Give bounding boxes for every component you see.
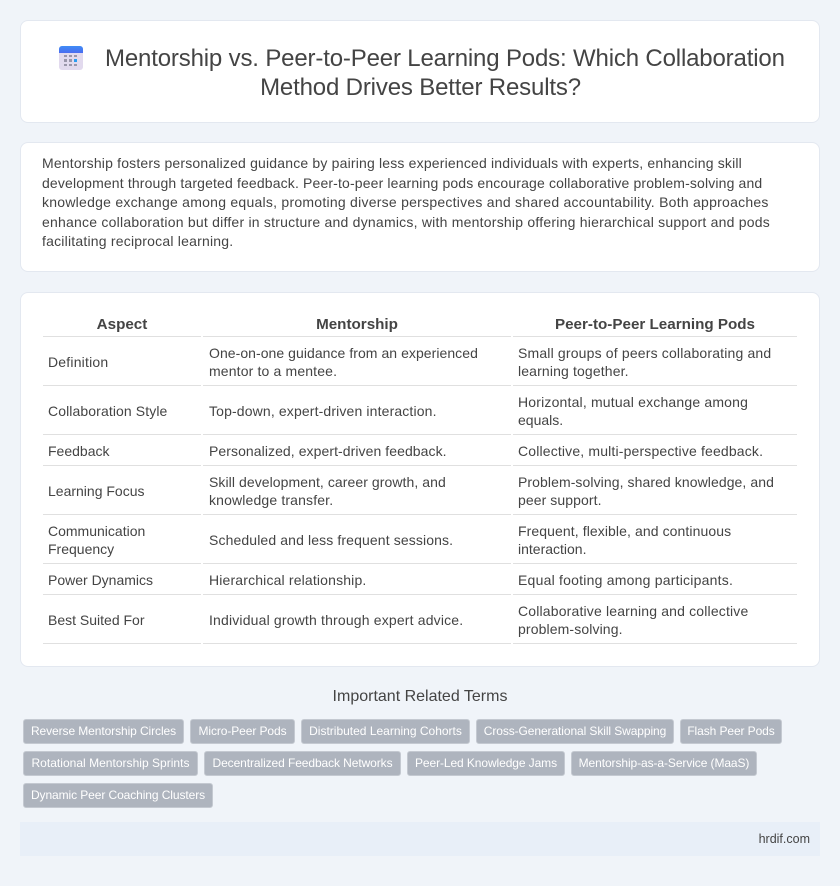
tag: Rotational Mentorship Sprints (32, 756, 190, 770)
heading (105, 45, 785, 101)
table header: Aspect (97, 316, 147, 333)
summary paragraph: enhance collaboration but differ in structure and dynamics, with mentorship offering hierarchical support and pods (42, 214, 770, 230)
row: best suited for: problem-solving. (518, 621, 623, 637)
row: power dynamics (48, 572, 733, 588)
row: power dynamics: Power Dynamics (48, 572, 153, 588)
row: feedback: Personalized, expert-driven feedback. (209, 443, 447, 459)
comparison table (43, 316, 797, 644)
summary paragraph: development through targeted feedback. Peer-to-peer learning pods encourage collaborative problem-solving and (42, 175, 762, 191)
summary paragraph: facilitating reciprocal learning. (42, 233, 233, 249)
row: feedback (48, 443, 763, 459)
row: communication frequency: Communication (48, 523, 145, 539)
row: feedback: Collective, multi-perspective feedback. (518, 443, 763, 459)
heading: Mentorship vs. Peer-to-Peer Learning Pods: Which Collaboration (105, 45, 785, 72)
row: communication frequency (48, 523, 731, 557)
tag: Dynamic Peer Coaching Clusters (31, 788, 205, 802)
row: best suited for: Individual growth through expert advice. (209, 612, 463, 628)
related term tags (23, 719, 782, 808)
panel: title (20, 20, 820, 123)
tag (23, 719, 184, 744)
row: collaboration style: Collaboration Style (48, 403, 167, 419)
row: collaboration style: Top-down, expert-driven interaction. (209, 403, 437, 419)
summary paragraph: knowledge exchange among equals, promoting diverse perspectives and shared accountability. Both approaches (42, 194, 769, 210)
tag (407, 751, 565, 776)
row: communication frequency: Frequency (48, 541, 114, 557)
row: learning focus: knowledge transfer. (209, 492, 333, 508)
tag: Peer-Led Knowledge Jams (415, 756, 557, 770)
tag (301, 719, 470, 744)
row: communication frequency: interaction. (518, 541, 586, 557)
panel: comparison table (20, 292, 820, 667)
tag (190, 719, 295, 744)
row: best suited for: Collaborative learning and collective (518, 603, 748, 619)
row: definition: learning together. (518, 363, 629, 379)
tag (571, 751, 757, 776)
footer source: hrdif.com (759, 832, 810, 846)
table header: Mentorship (316, 316, 398, 333)
table header: Peer-to-Peer Learning Pods (555, 316, 755, 333)
row: definition (48, 345, 771, 379)
tag (680, 719, 782, 744)
row: power dynamics: Hierarchical relationship. (209, 572, 366, 588)
tag: Distributed Learning Cohorts (309, 724, 462, 738)
row: collaboration style: equals. (518, 412, 563, 428)
tag: Cross-Generational Skill Swapping (484, 724, 666, 738)
tag: Micro-Peer Pods (198, 724, 286, 738)
row: best suited for: Best Suited For (48, 612, 144, 628)
tag: Decentralized Feedback Networks (213, 756, 392, 770)
row: learning focus: Problem-solving, shared knowledge, and (518, 474, 774, 490)
row: learning focus (48, 474, 774, 508)
tag (476, 719, 674, 744)
row: definition: Definition (48, 354, 108, 370)
row: communication frequency: Frequent, flexible, and continuous (518, 523, 731, 539)
row: collaboration style: Horizontal, mutual exchange among (518, 394, 748, 410)
tag (23, 783, 213, 808)
row: communication frequency: Scheduled and less frequent sessions. (209, 532, 453, 548)
summary paragraph (42, 155, 770, 249)
table header (97, 316, 755, 333)
row: learning focus: Skill development, career growth, and (209, 474, 446, 490)
row: definition: Small groups of peers collaborating and (518, 345, 771, 361)
row: power dynamics: Equal footing among participants. (518, 572, 733, 588)
tag: Reverse Mentorship Circles (31, 724, 176, 738)
heading: Method Drives Better Results? (260, 74, 581, 101)
row: definition: One-on-one guidance from an experienced (209, 345, 478, 361)
tag: Flash Peer Pods (687, 724, 775, 738)
row: definition: mentor to a mentee. (209, 363, 337, 379)
tag: Mentorship-as-a-Service (MaaS) (579, 756, 749, 770)
footer bar (20, 822, 820, 856)
row: learning focus: peer support. (518, 492, 602, 508)
tag (204, 751, 401, 776)
summary paragraph: Mentorship fosters personalized guidance by pairing less experienced individuals with experts, enhancing skill (42, 155, 742, 171)
tag (23, 751, 198, 776)
row: feedback: Feedback (48, 443, 109, 459)
heading: related terms: Important Related Terms (333, 688, 507, 705)
icon: calendar (59, 46, 83, 70)
row: collaboration style (48, 394, 748, 428)
row: learning focus: Learning Focus (48, 483, 145, 499)
row: best suited for (48, 603, 748, 637)
panel: summary text (20, 142, 820, 272)
